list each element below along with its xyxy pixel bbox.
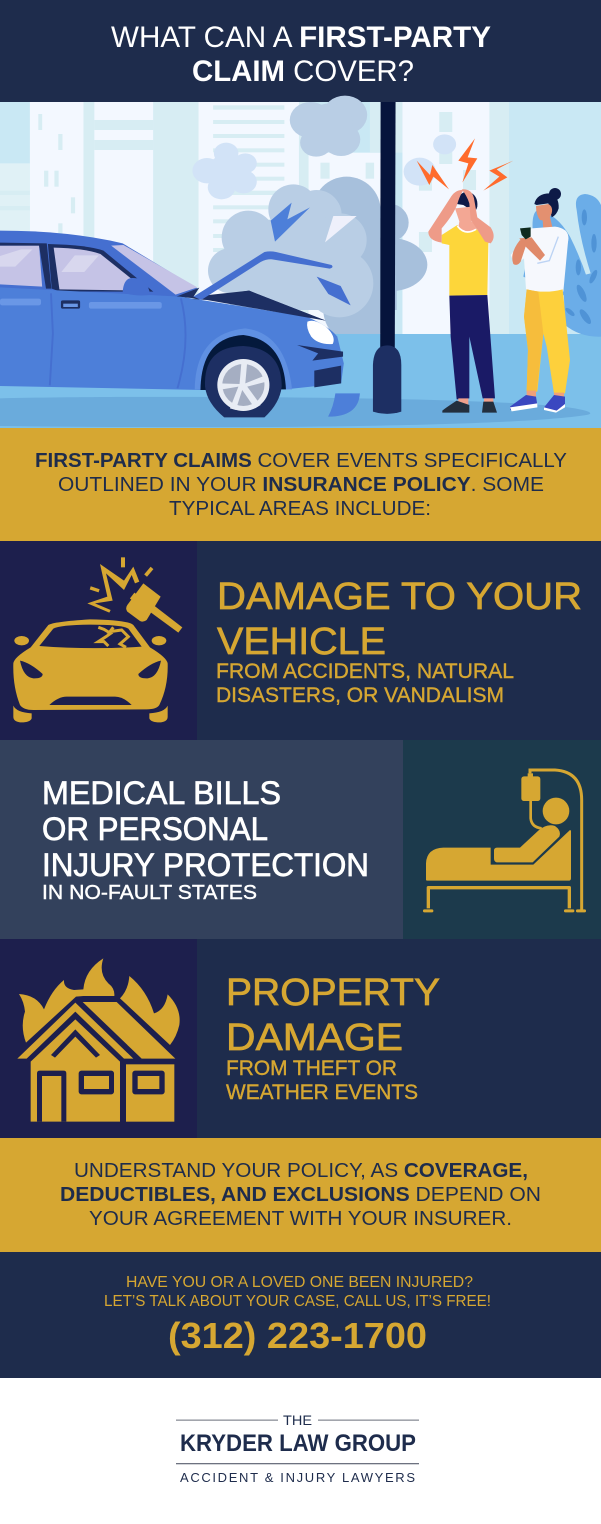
heading: damage to your vehicle: DAMAGE TO YOUR [217, 576, 582, 618]
text: theft or weather: WEATHER EVENTS [226, 1081, 418, 1104]
heading: property damage: PROPERTY [226, 972, 440, 1014]
icon: hospital bed with iv drip [423, 770, 586, 912]
panel: policy note gold band [0, 1138, 601, 1252]
heading: damage to your vehicle: VEHICLE [217, 621, 386, 663]
policy note text: YOUR AGREEMENT WITH YOUR INSURER. [89, 1208, 512, 1230]
policy note text [60, 1160, 541, 1230]
logo: the kryder law group: ACCIDENT & INJURY LAWYERS [180, 1470, 415, 1485]
panel: intro gold band [0, 429, 601, 541]
heading: property damage [226, 972, 440, 1059]
cta text [104, 1274, 491, 1310]
icon: car with hammer [13, 557, 182, 722]
panel: title header [0, 0, 601, 102]
woman with phone [510, 188, 570, 413]
heading: medical bills: MEDICAL BILLS [42, 775, 281, 811]
text: theft or weather: FROM THEFT OR [226, 1057, 397, 1080]
logo: the kryder law group: KRYDER LAW GROUP [180, 1430, 416, 1457]
phone number: (312) 223-1700 [168, 1315, 427, 1356]
intro text: TYPICAL AREAS INCLUDE: [169, 498, 431, 520]
panel: damage to your vehicle [0, 541, 601, 740]
car [0, 231, 360, 417]
heading: medical bills [42, 775, 369, 883]
ground [0, 334, 601, 429]
heading: damage to your vehicle [217, 576, 582, 663]
heading: property damage: DAMAGE [226, 1017, 403, 1059]
text: damage causes: FROM ACCIDENTS, NATURAL [216, 660, 514, 683]
text: damage causes: DISASTERS, OR VANDALISM [216, 684, 504, 707]
man holding head [428, 189, 497, 413]
lightning bolts [417, 138, 513, 191]
intro text: OUTLINED IN YOUR INSURANCE POLICY . SOME [58, 474, 544, 496]
intro text: FIRST-PARTY CLAIMS COVER EVENTS SPECIFICALLY [35, 450, 567, 472]
logo: the kryder law group: THE [283, 1412, 312, 1428]
cta text: HAVE YOU OR A LOVED ONE BEEN INJURED? [126, 1274, 473, 1291]
panel: property damage [0, 939, 601, 1138]
text: theft or weather [226, 1057, 418, 1104]
smoke cloud [208, 177, 427, 343]
title: WHAT CAN A FIRST-PARTY [111, 21, 491, 54]
panel: crash illustration [0, 96, 601, 430]
panel: medical bills [0, 740, 601, 939]
panel: call to action [0, 1252, 601, 1378]
plant [523, 194, 601, 337]
icon: house on fire [17, 958, 180, 1122]
lamp post [373, 102, 401, 414]
logo: the kryder law group [176, 1412, 419, 1485]
policy note text: UNDERSTAND YOUR POLICY, AS COVERAGE, [74, 1160, 528, 1182]
text: no-fault states: IN NO-FAULT STATES [42, 882, 257, 904]
heading: medical bills: OR PERSONAL [42, 811, 268, 847]
title: CLAIM COVER? [192, 55, 414, 88]
heading: medical bills: INJURY PROTECTION [42, 847, 369, 883]
text: damage causes [216, 660, 514, 707]
cta text: LET’S TALK ABOUT YOUR CASE, CALL US, IT’S FREE! [104, 1293, 491, 1310]
policy note text: DEDUCTIBLES, AND EXCLUSIONS DEPEND ON [60, 1184, 541, 1206]
title [111, 21, 491, 88]
people and plant [417, 138, 601, 413]
intro text [35, 450, 567, 520]
